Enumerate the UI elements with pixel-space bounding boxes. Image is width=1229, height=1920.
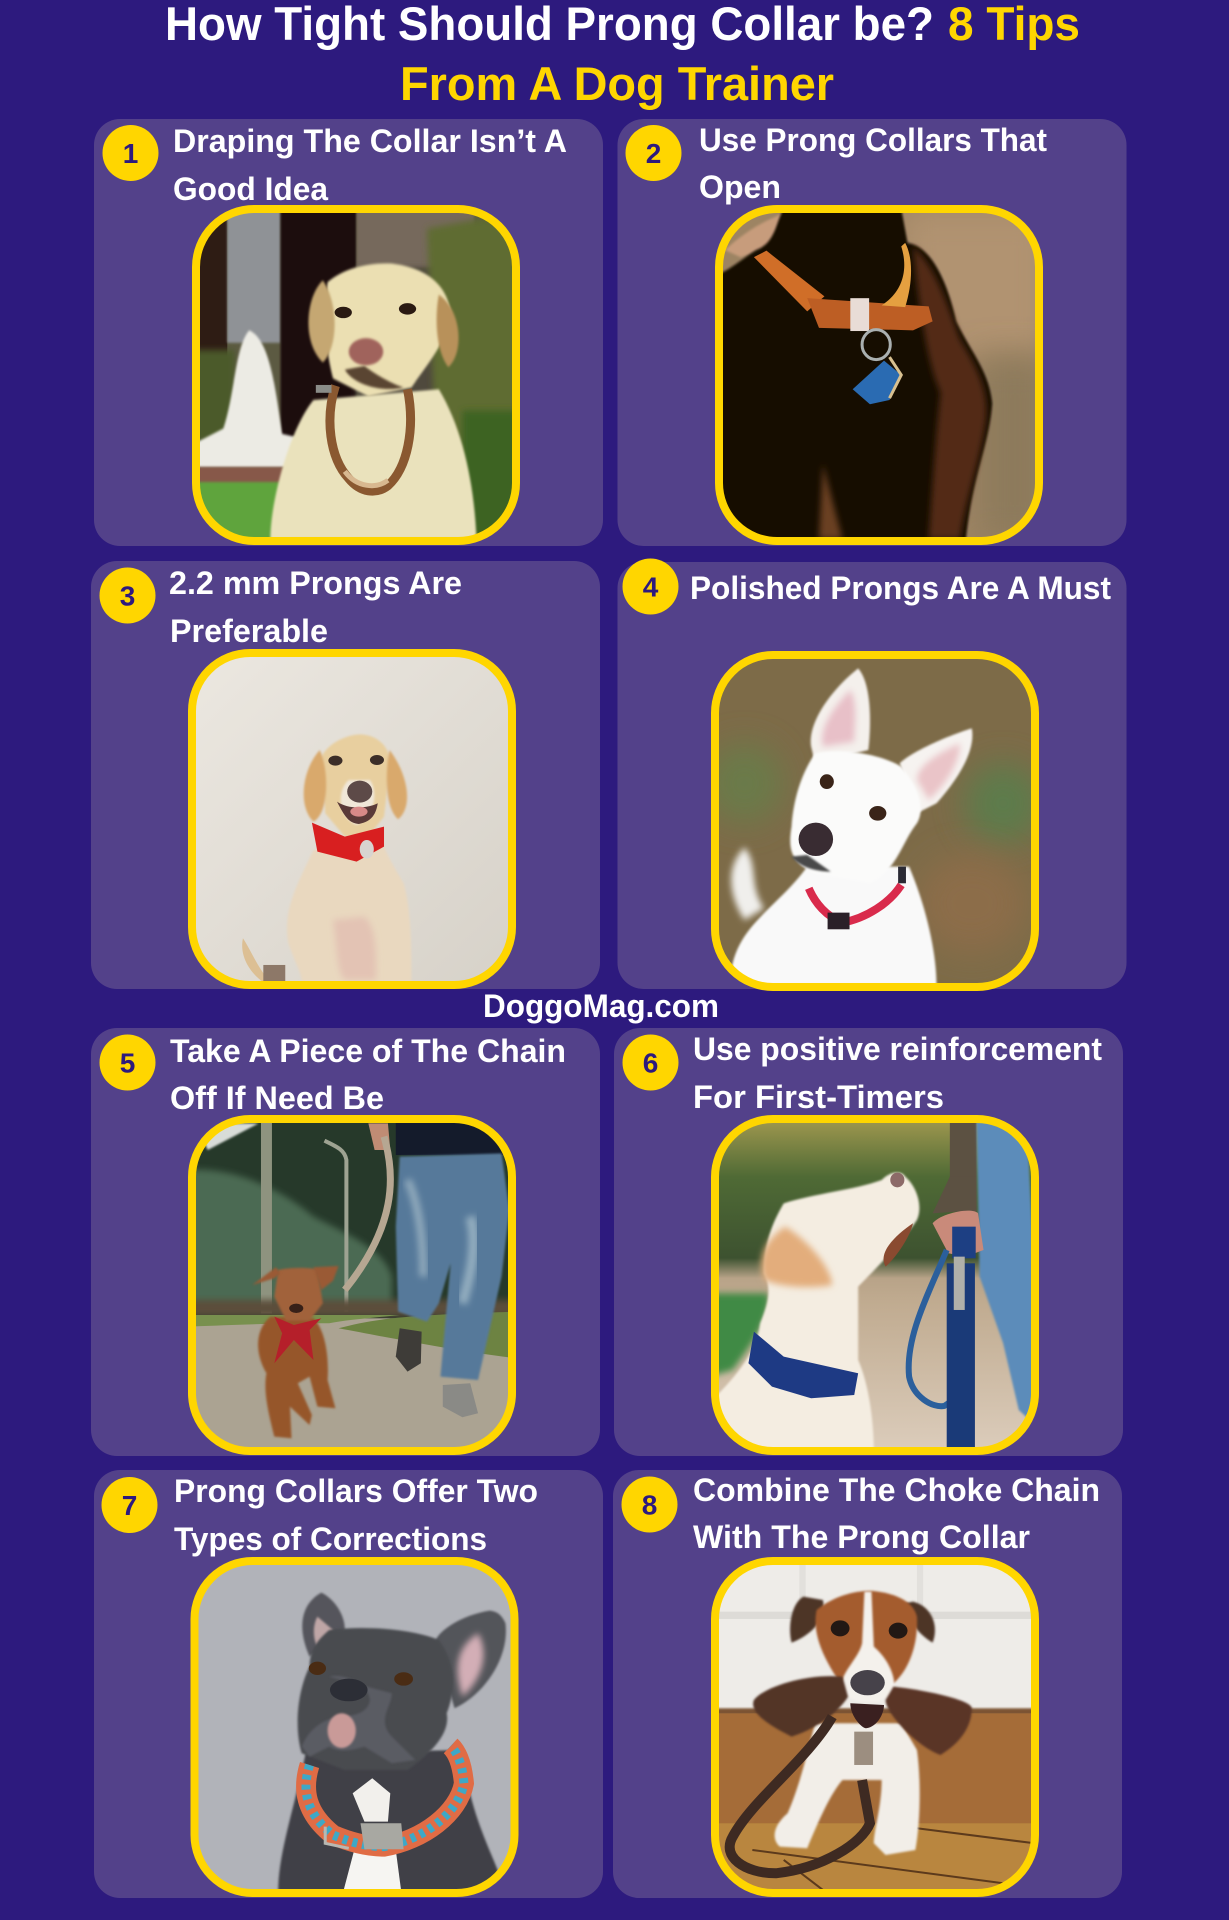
badge: number 6 bbox=[622, 1034, 678, 1090]
badge: number 2 bbox=[626, 125, 682, 181]
heading: tip 2: Open bbox=[699, 169, 781, 205]
title bbox=[165, 0, 1080, 110]
badge: number 7 bbox=[102, 1477, 158, 1533]
heading: tip 5: Take A Piece of The Chain bbox=[170, 1033, 566, 1069]
badge: number 7: 7 bbox=[122, 1490, 137, 1521]
badge: number 8: 8 bbox=[642, 1490, 657, 1520]
heading: tip 1: Good Idea bbox=[173, 171, 328, 207]
panel: tip 4 bbox=[618, 558, 1126, 990]
heading: tip 7 bbox=[174, 1473, 538, 1557]
heading: tip 3: Preferable bbox=[170, 613, 328, 649]
badge: number 5: 5 bbox=[120, 1048, 135, 1078]
badge: number 2: 2 bbox=[646, 138, 661, 169]
heading: tip 2: Use Prong Collars That bbox=[699, 122, 1047, 158]
photo: brown puppy walking on a leash beside a person bbox=[180, 1117, 525, 1453]
badge: number 3 bbox=[100, 568, 156, 624]
heading: tip 2 bbox=[699, 122, 1047, 205]
badge: number 4 bbox=[622, 558, 678, 614]
heading: tip 8 bbox=[693, 1472, 1100, 1555]
heading: tip 6: Use positive reinforcement bbox=[693, 1031, 1102, 1067]
heading: tip 6 bbox=[693, 1031, 1102, 1115]
heading: tip 8: Combine The Choke Chain bbox=[693, 1472, 1100, 1508]
heading: tip 5: Off If Need Be bbox=[170, 1080, 384, 1116]
badge: number 3: 3 bbox=[120, 580, 135, 612]
panel: tip 1 bbox=[94, 119, 603, 546]
heading: tip 8: With The Prong Collar bbox=[693, 1519, 1030, 1555]
site credit: DoggoMag.com bbox=[483, 988, 719, 1024]
badge: number 1: 1 bbox=[123, 138, 138, 169]
photo: cream dog with red collar on white background bbox=[180, 650, 525, 987]
panel: tip 7 bbox=[94, 1470, 603, 1898]
photo: dark dog with orange collar and blue tag bbox=[705, 207, 1050, 543]
heading: tip 6: For First-Timers bbox=[693, 1079, 944, 1115]
title: From A Dog Trainer bbox=[400, 57, 834, 110]
panel: tip 2 bbox=[618, 119, 1126, 546]
photo: white dog with red collar tilting head bbox=[705, 650, 1050, 990]
heading: tip 3 bbox=[169, 565, 462, 649]
heading: tip 4: Polished Prongs Are A Must bbox=[690, 570, 1111, 606]
badge: number 4: 4 bbox=[643, 572, 659, 602]
badge: number 8 bbox=[622, 1476, 678, 1532]
panel: tip 8 bbox=[613, 1470, 1122, 1898]
photo: white dog with blue collar looking up at owner bbox=[705, 1117, 1050, 1453]
photo: grey French bulldog with braided collar bbox=[180, 1557, 525, 1897]
heading: tip 5 bbox=[170, 1033, 566, 1116]
photo: terrier holding a leather leash in its mouth bbox=[705, 1557, 1050, 1893]
heading: tip 7: Types of Corrections bbox=[174, 1521, 487, 1557]
badge: number 1 bbox=[102, 125, 158, 181]
panel: tip 5 bbox=[91, 1028, 600, 1456]
photo: yellow labrador holding leather collar bbox=[188, 207, 525, 543]
badge: number 6: 6 bbox=[643, 1048, 658, 1078]
badge: number 5 bbox=[100, 1034, 156, 1090]
panel: tip 6 bbox=[614, 1028, 1123, 1456]
heading: tip 3: 2.2 mm Prongs Are bbox=[169, 565, 462, 601]
heading: tip 1 bbox=[173, 123, 567, 207]
panel: tip 3 bbox=[91, 561, 600, 989]
heading: tip 7: Prong Collars Offer Two bbox=[174, 1473, 538, 1509]
heading: tip 1: Draping The Collar Isn’t A bbox=[173, 123, 567, 159]
